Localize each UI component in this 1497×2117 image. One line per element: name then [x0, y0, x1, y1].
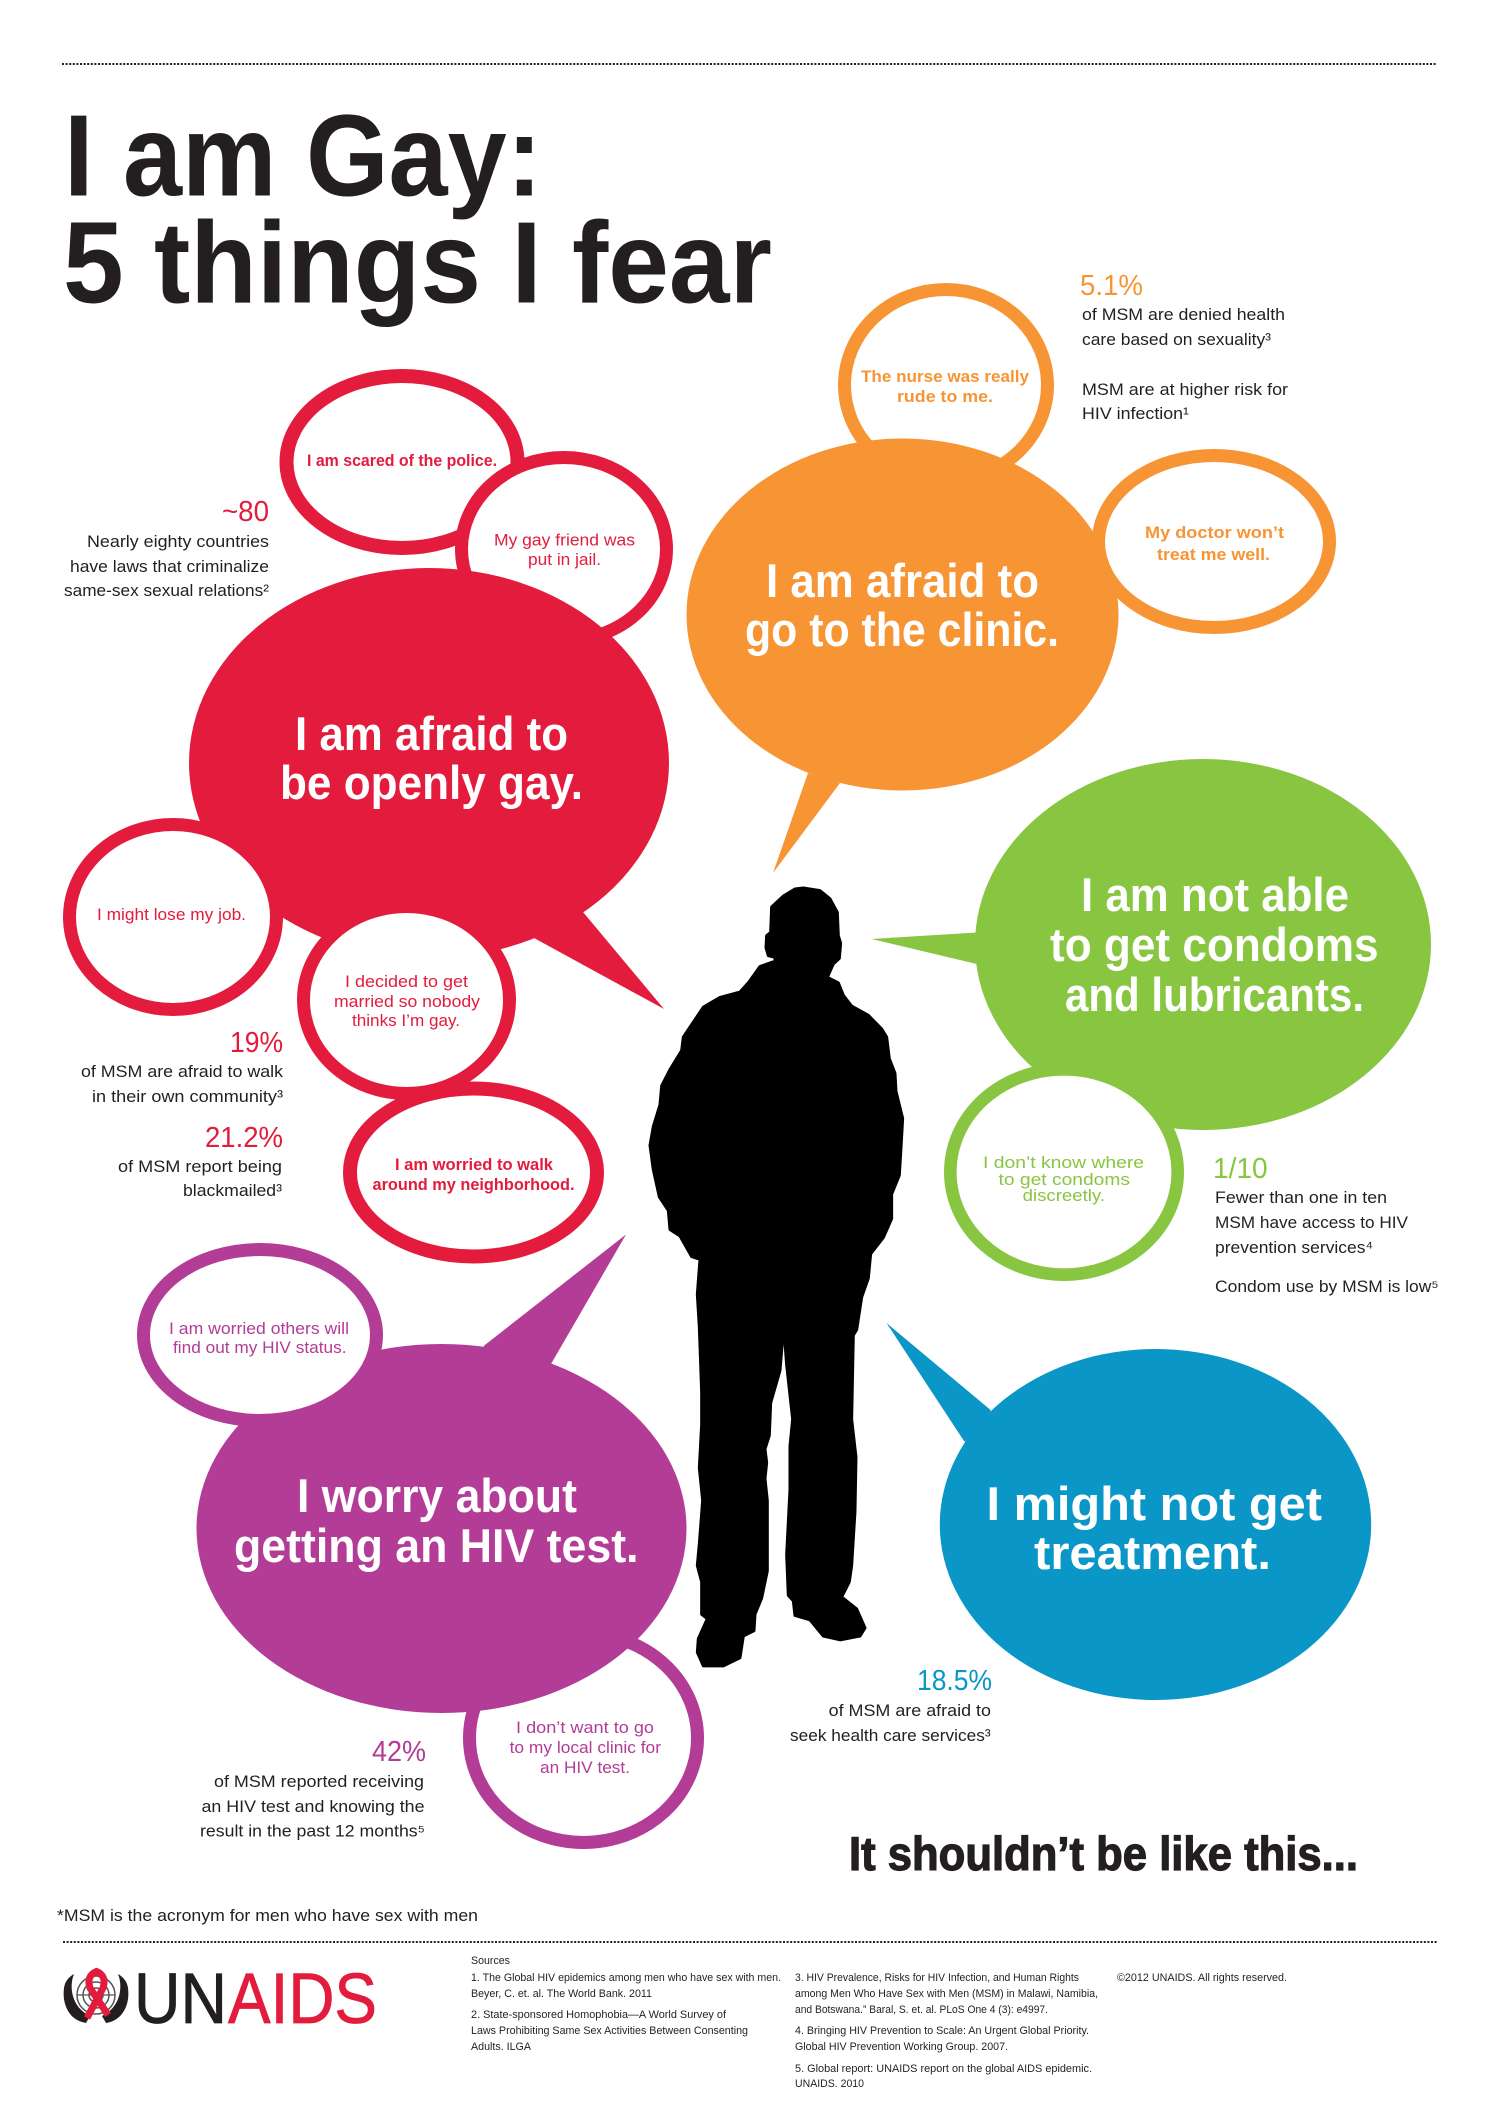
bubble: others find out HIV status: find out my HIV status. — [173, 1338, 346, 1357]
stat: 19% — [81, 1027, 284, 1106]
stat: 21.2% — [118, 1122, 283, 1200]
stat: 1/10: 1/10 — [1213, 1153, 1268, 1185]
bubble: nurse was rude — [844, 290, 1048, 480]
main speech bubble: purple — [196, 1234, 686, 1713]
UNAIDS logo — [64, 1960, 377, 2039]
main speech bubble: orange: I am afraid to — [766, 554, 1039, 607]
stat: ~80 countries — [64, 496, 269, 600]
stat: 1/10: Condom use by MSM is low⁵ — [1215, 1277, 1439, 1296]
panel: might not get treatment (blue): I might not get — [986, 1477, 1322, 1530]
panel: not able to get condoms (green) — [872, 759, 1431, 1275]
icon: UN emblem with red ribbon — [64, 1972, 128, 2023]
stat: 18.5%: of MSM are afraid to — [829, 1701, 991, 1720]
bubble: married so nobody thinks I'm gay: married so nobody — [334, 992, 481, 1011]
closing statement: It shouldn’t be like this... — [849, 1827, 1358, 1880]
bubble: where to get condoms: discreetly. — [1023, 1186, 1105, 1205]
bubble: where to get condoms: to get condoms — [998, 1170, 1130, 1189]
sources column 2: Global HIV Prevention Working Group. 2007. — [795, 2041, 1008, 2053]
bubble: scared of the police: I am scared of the police. — [307, 451, 497, 470]
sources column 2: 3. HIV Prevalence, Risks for HIV Infection, and Human Rights — [795, 1972, 1079, 1984]
stat: 18.5%: seek health care services³ — [790, 1726, 991, 1745]
sources column 1: Beyer, C. et. al. The World Bank. 2011 — [471, 1988, 652, 2000]
main speech bubble: orange — [686, 438, 1118, 873]
copyright: ©2012 UNAIDS. All rights reserved. — [1117, 1972, 1287, 1984]
sources column 2: 5. Global report: UNAIDS report on the global AIDS epidemic. — [795, 2063, 1092, 2075]
title: I am Gay: — [64, 90, 542, 220]
stat: 42% — [200, 1736, 426, 1840]
stat: 5.1%: of MSM are denied health — [1082, 305, 1285, 324]
stat: 19%: 19% — [230, 1027, 283, 1059]
bubble: gay friend in jail: My gay friend was — [494, 530, 635, 550]
sources column 1: Adults. ILGA — [471, 2041, 532, 2053]
bubble: don't want to go to local clinic: an HIV test. — [540, 1758, 630, 1777]
bubble: married so nobody thinks I'm gay: thinks I’m gay. — [352, 1011, 460, 1030]
bubble: others find out HIV status — [144, 1250, 376, 1420]
sources column 1: 1. The Global HIV epidemics among men who have sex with men. — [471, 1972, 781, 1984]
stat: 1/10: MSM have access to HIV — [1215, 1213, 1409, 1232]
silhouette of a man — [650, 888, 903, 1666]
UNAIDS logo: AIDS — [228, 1960, 377, 2039]
panel: afraid to go to the clinic (orange) — [686, 290, 1330, 873]
bubble: don't want to go to local clinic: I don’t want to go — [516, 1718, 654, 1737]
bubble: doctor won't treat me well: My doctor won’t — [1145, 523, 1284, 542]
stat: 1/10: Fewer than one in ten — [1215, 1188, 1387, 1207]
bubble: gay friend in jail — [462, 458, 666, 640]
main speech bubble: green: I am not able — [1081, 868, 1349, 921]
bubble: nurse was rude: The nurse was really — [861, 367, 1030, 386]
bubble: worried to walk around neighborhood: I am worried to walk — [395, 1155, 554, 1174]
bubble: where to get condoms — [950, 1069, 1178, 1275]
bubble: might lose my job: I might lose my job. — [97, 905, 246, 924]
main speech bubble: purple: getting an HIV test. — [234, 1519, 638, 1572]
stat: 21.2%: 21.2% — [205, 1122, 283, 1154]
stat: 21.2%: of MSM report being — [118, 1157, 282, 1176]
stat: 5.1% — [1080, 270, 1288, 423]
stat: 18.5%: 18.5% — [917, 1665, 992, 1697]
panel: might not get treatment (blue): treatment. — [1034, 1526, 1271, 1579]
panel: afraid to be openly gay (red) — [70, 376, 669, 1256]
bubble: scared of the police — [286, 376, 518, 548]
bubble: don't want to go to local clinic: to my local clinic for — [510, 1738, 661, 1757]
stat: 19%: in their own community³ — [92, 1087, 283, 1106]
stat: ~80 countries: Nearly eighty countries — [87, 532, 269, 551]
bubble: nurse was rude: rude to me. — [897, 387, 993, 406]
main speech bubble: red — [189, 568, 669, 1009]
stat: 42%: an HIV test and knowing the — [202, 1797, 424, 1816]
stat: 42%: result in the past 12 months⁵ — [200, 1822, 425, 1840]
bubble: doctor won't treat me well — [1098, 456, 1330, 628]
title: 5 things I fear — [63, 198, 772, 328]
stat: ~80 countries: same-sex sexual relations² — [64, 581, 269, 600]
stat: 5.1%: care based on sexuality³ — [1082, 330, 1271, 349]
title — [63, 90, 772, 328]
main speech bubble: purple: I worry about — [297, 1469, 577, 1522]
stat: 42%: 42% — [372, 1736, 426, 1768]
bubble: doctor won't treat me well: treat me well. — [1157, 545, 1270, 564]
stat: 19%: of MSM are afraid to walk — [81, 1062, 284, 1081]
panel: worry about HIV test (purple) — [144, 1234, 698, 1842]
stat: 1/10 — [1213, 1153, 1439, 1296]
stat: ~80 countries: have laws that criminalize — [70, 557, 269, 576]
bubble: worried to walk around neighborhood — [350, 1088, 597, 1256]
stat: 18.5% — [790, 1665, 992, 1745]
bubble: don't want to go to local clinic — [470, 1634, 698, 1842]
stat: 5.1%: HIV infection¹ — [1082, 404, 1189, 423]
stat: 5.1%: MSM are at higher risk for — [1082, 380, 1288, 399]
stat: ~80 countries: ~80 — [222, 496, 269, 528]
UNAIDS logo: UN — [134, 1960, 227, 2039]
main speech bubble: red: I am afraid to — [295, 707, 568, 760]
sources column 2 — [795, 1972, 1098, 2090]
main speech bubble: green — [872, 759, 1431, 1130]
bubble: gay friend in jail: put in jail. — [528, 550, 601, 569]
bubble: worried to walk around neighborhood: around my neighborhood. — [372, 1175, 574, 1194]
main speech bubble: orange: go to the clinic. — [745, 603, 1059, 656]
main speech bubble: red: be openly gay. — [280, 756, 583, 809]
sources column 2: UNAIDS. 2010 — [795, 2078, 864, 2090]
main speech bubble: green: and lubricants. — [1065, 968, 1364, 1021]
sources column 1: Laws Prohibiting Same Sex Activities Between Consenting — [471, 2025, 748, 2037]
main speech bubble: green: to get condoms — [1050, 918, 1378, 971]
stat: 1/10: prevention services⁴ — [1215, 1238, 1373, 1257]
sources column 1: Sources — [471, 1955, 510, 1967]
bubble: others find out HIV status: I am worried others will — [169, 1319, 349, 1338]
sources column 2: 4. Bringing HIV Prevention to Scale: An Urgent Global Priority. — [795, 2025, 1089, 2037]
stat: 21.2%: blackmailed³ — [183, 1181, 282, 1200]
sources column 2: among Men Who Have Sex with Men (MSM) in Malawi, Namibia, — [795, 1988, 1098, 2000]
bubble: married so nobody thinks I'm gay — [304, 906, 510, 1094]
sources column 1 — [471, 1955, 781, 2053]
stat: 5.1%: 5.1% — [1080, 270, 1143, 302]
footnote: MSM acronym: *MSM is the acronym for men who have sex with men — [57, 1906, 478, 1925]
stat: 42%: of MSM reported receiving — [214, 1772, 424, 1791]
sources column 1: 2. State-sponsored Homophobia—A World Survey of — [471, 2009, 727, 2021]
bubble: where to get condoms: I don’t know where — [983, 1153, 1144, 1172]
panel: might not get treatment (blue) — [886, 1323, 1371, 1700]
bubble: might lose my job — [70, 824, 276, 1010]
bubble: married so nobody thinks I'm gay: I decided to get — [345, 972, 468, 991]
sources column 2: and Botswana.” Baral, S. et. al. PLoS One 4 (3): e4997. — [795, 2004, 1048, 2016]
